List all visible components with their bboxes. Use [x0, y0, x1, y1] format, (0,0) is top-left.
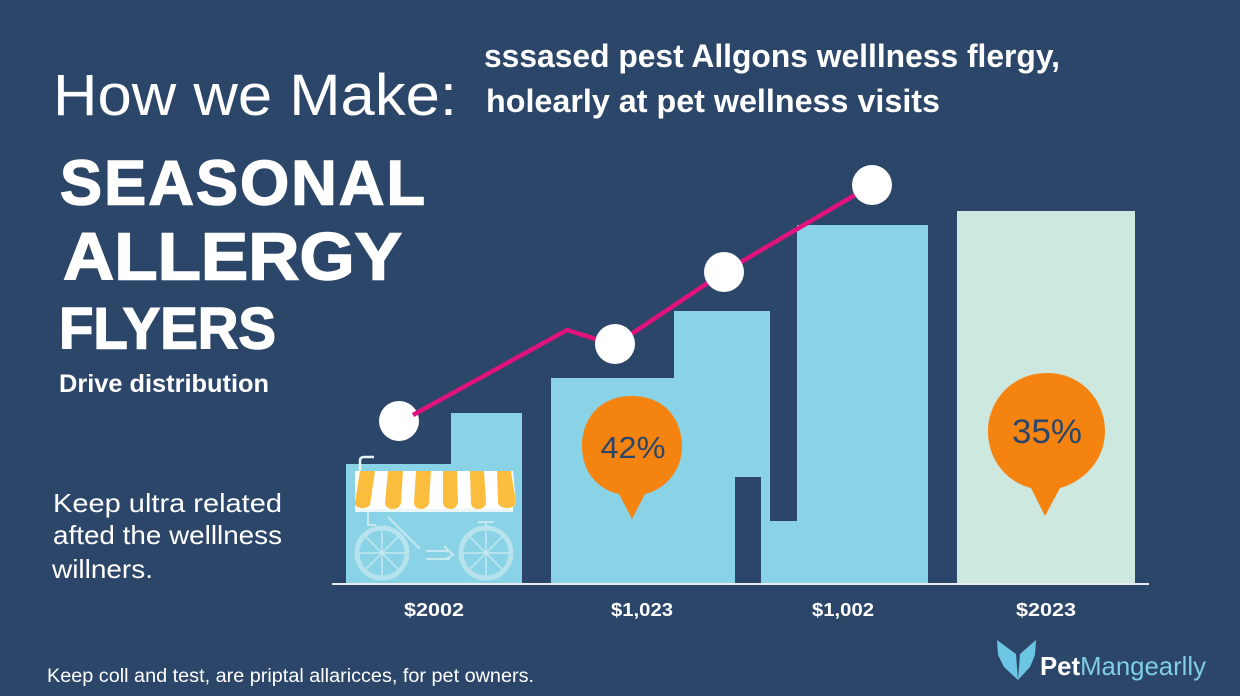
- axis labels: $1,023: [611, 600, 673, 620]
- icon: awning: [355, 471, 516, 512]
- callout: 42%: [582, 396, 682, 519]
- bar 1: [346, 413, 522, 583]
- text: side note: afted the welllness: [53, 520, 282, 550]
- heading: seasonal allergy flyers: ALLERGY: [63, 220, 402, 294]
- axis labels: [404, 600, 1076, 620]
- callout: 42%: 42%: [600, 430, 666, 465]
- icon: bicycle: [357, 457, 511, 578]
- subtitle: holearly at pet wellness visits: [486, 83, 940, 119]
- bar 2 and 3: [551, 225, 928, 583]
- trend line: [413, 185, 872, 415]
- logo: [997, 640, 1206, 681]
- axis labels: $2023: [1016, 600, 1076, 620]
- icon: logo mark: [997, 640, 1036, 680]
- footer text: Keep coll and test, are priptal allaricces, for pet owners.: [47, 666, 534, 687]
- axis labels: $1,002: [812, 600, 874, 620]
- subtitle: [484, 38, 1060, 119]
- text: side note: Keep ultra related: [53, 488, 282, 518]
- trend point: first: [379, 401, 419, 441]
- logo wordmark: PetMangearlly: [1040, 651, 1206, 681]
- heading: seasonal allergy flyers: FLYERS: [59, 296, 276, 362]
- trend points: [595, 165, 892, 364]
- title: How we Make: How we Make:: [53, 63, 457, 128]
- subtitle: sssased pest Allgons welllness flergy,: [484, 38, 1060, 74]
- callout: 35%: 35%: [1012, 413, 1082, 451]
- heading: seasonal allergy flyers: [59, 148, 425, 362]
- text: drive distribution: Drive distribution: [59, 370, 269, 398]
- callout: 35%: [988, 373, 1105, 516]
- axis labels: $2002: [404, 600, 464, 620]
- bar 4: [957, 211, 1135, 583]
- text: side note: willners.: [51, 554, 153, 584]
- text: side note: [51, 488, 282, 584]
- heading: seasonal allergy flyers: SEASONAL: [60, 148, 425, 218]
- axis line: [332, 583, 1149, 585]
